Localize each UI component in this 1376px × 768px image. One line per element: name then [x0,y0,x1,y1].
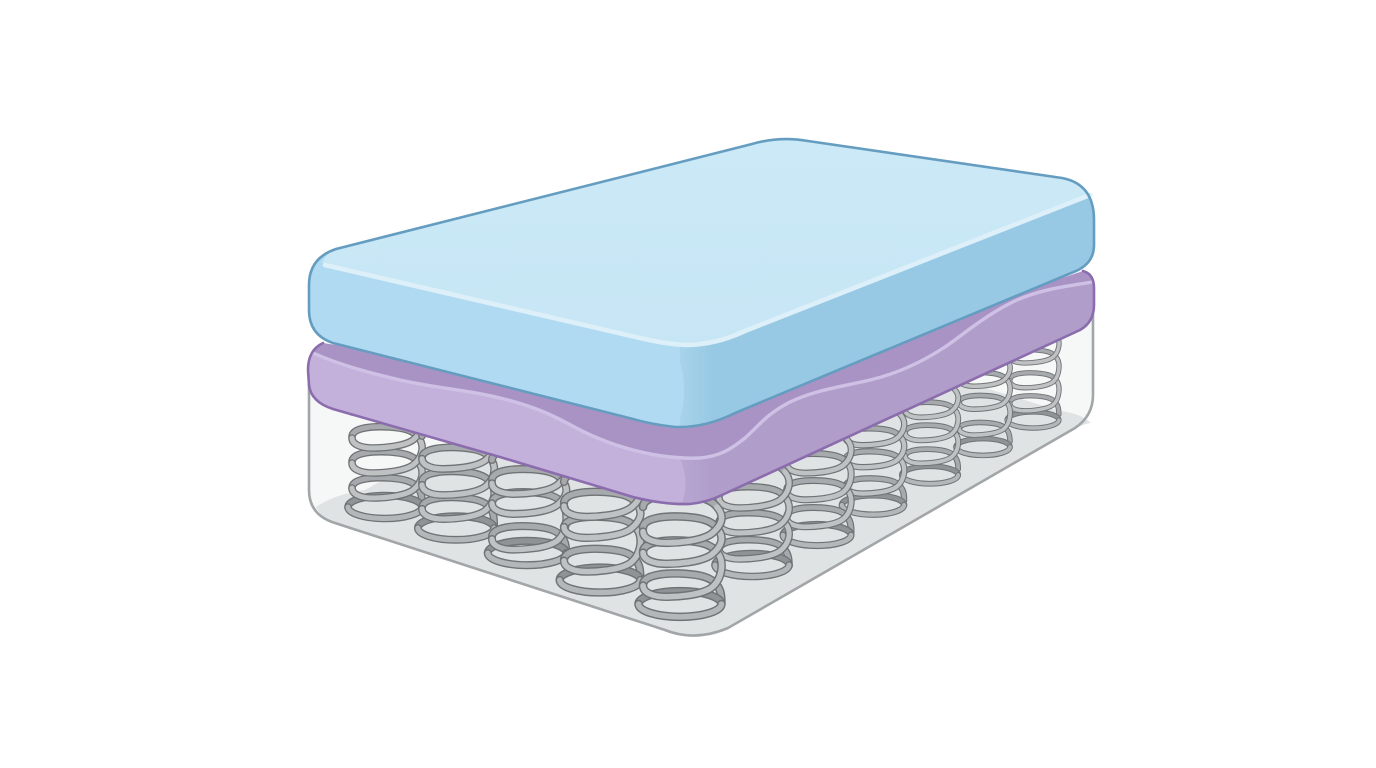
blue top foam layer [309,139,1094,427]
purple right face [670,282,1094,504]
blue highlight edge [325,195,1090,345]
base outline [309,315,1093,636]
spring G [783,431,851,546]
spring I [902,382,958,484]
blue top face [322,139,1090,345]
blue left face corner [660,343,684,424]
spring F [715,462,789,576]
spring E [639,495,722,617]
purple comfort layer [308,271,1094,504]
coil springs [348,328,1059,617]
spring J [956,352,1010,455]
purple highlight line [313,282,1092,458]
spring H [842,406,904,515]
spring D [560,471,640,593]
spring A [348,402,422,518]
purple outline [308,271,1094,504]
spring K [1007,328,1059,428]
blue right face [680,195,1094,427]
spring C [488,449,566,565]
spring B [418,425,494,540]
blue outline [309,139,1094,427]
purple left face [308,353,686,503]
base floor [316,300,1091,636]
spring base: glass case [309,300,1093,636]
